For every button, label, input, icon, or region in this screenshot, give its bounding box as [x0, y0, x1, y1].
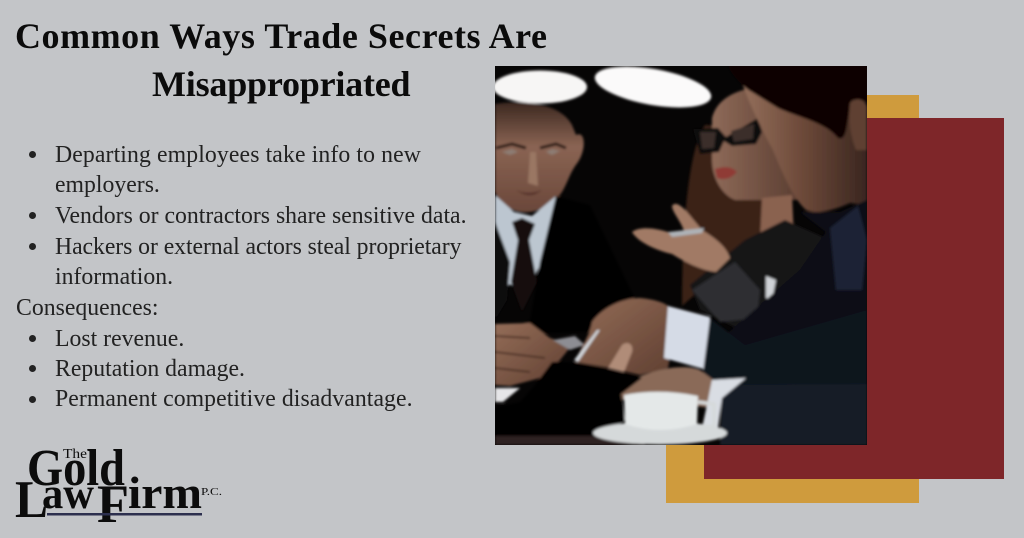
title	[15, 16, 548, 104]
man on right	[700, 66, 867, 400]
logo: The Gold Law Firm P.C.: P.C.	[201, 486, 222, 498]
man on left	[495, 102, 650, 335]
text block: ways secrets are misappropriated: Departing employees take info to new	[55, 142, 421, 168]
logo: The Gold Law Firm P.C.	[15, 440, 222, 534]
logo: The Gold Law Firm P.C.: F	[97, 474, 129, 534]
heading: consequences: Consequences:	[16, 295, 158, 321]
logo: The Gold Law Firm P.C.: The	[63, 447, 87, 462]
text block: ways secrets are misappropriated: information.	[55, 264, 173, 290]
text block: ways secrets are misappropriated: Vendors or contractors share sensitive data.	[55, 203, 467, 229]
lower hand and cuff	[620, 367, 746, 428]
title: Common Ways Trade Secrets Are	[15, 16, 548, 56]
coffee cup and saucer	[593, 392, 727, 444]
table	[495, 436, 645, 445]
text block: consequences list: Permanent competitive disadvantage.	[55, 386, 413, 412]
woman's raised hand with pen	[632, 204, 730, 272]
center hand with pen	[574, 298, 710, 375]
text block: consequences list	[29, 326, 413, 412]
woman	[682, 88, 840, 340]
right sleeve	[703, 310, 867, 445]
logo: The Gold Law Firm P.C.: aw	[42, 469, 94, 518]
panel: gold accent block	[666, 95, 919, 503]
panel: maroon accent block	[704, 118, 1004, 479]
title: Misappropriated	[152, 64, 410, 104]
logo: The Gold Law Firm P.C.: L	[15, 471, 48, 529]
photo: business people meeting under lamps	[495, 66, 867, 445]
text block: consequences list: Reputation damage.	[55, 356, 245, 382]
black folder	[495, 362, 642, 438]
logo: The Gold Law Firm P.C.: Gold	[27, 440, 125, 497]
text block: consequences list: Lost revenue.	[55, 326, 184, 352]
white paper	[495, 388, 520, 402]
logo: The Gold Law Firm P.C.: irm	[128, 467, 202, 518]
left clasped hands	[495, 323, 585, 386]
text block: ways secrets are misappropriated	[29, 142, 467, 290]
text block: ways secrets are misappropriated: Hackers or external actors steal proprietary	[55, 234, 461, 260]
text block: ways secrets are misappropriated: employers.	[55, 172, 160, 198]
lamps	[493, 59, 714, 115]
